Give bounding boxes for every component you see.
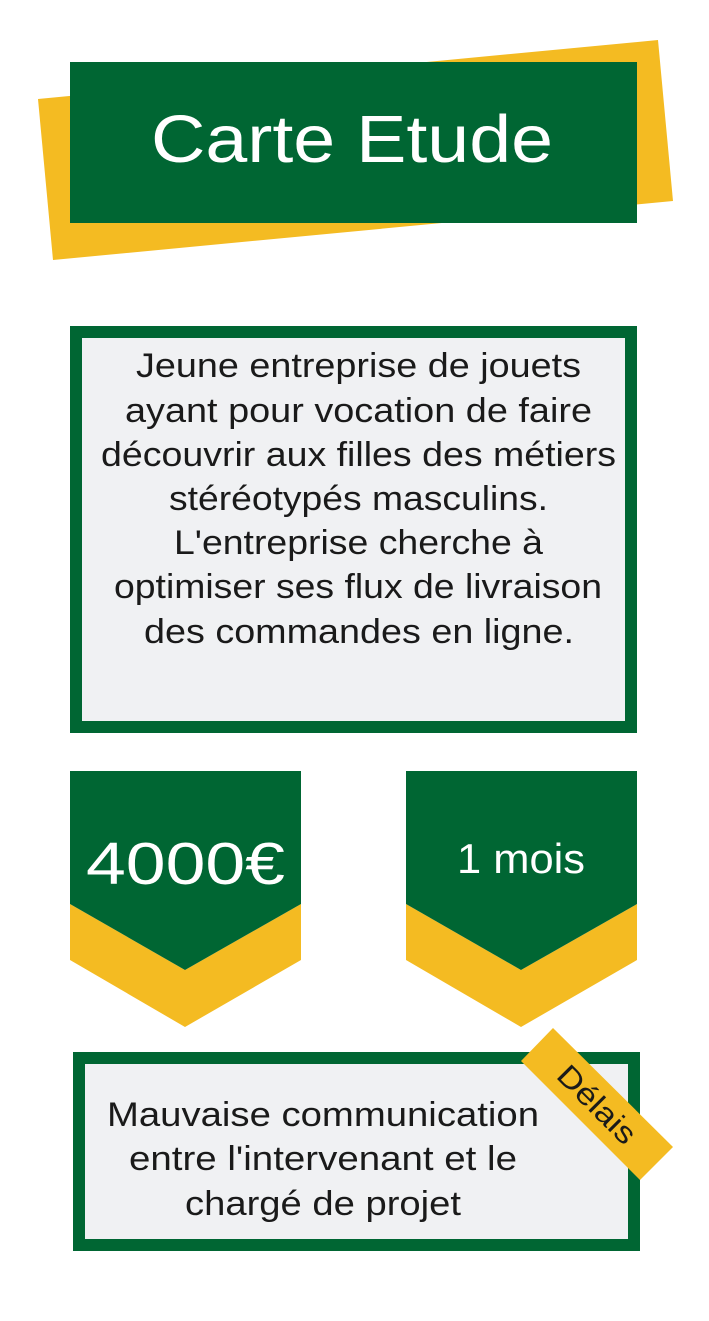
delays text: Mauvaise communication [107,1096,539,1134]
ribbon: Délais [521,1028,673,1180]
title banner [38,40,673,260]
delays text [107,1096,539,1223]
ribbon label: Délais [550,1059,643,1151]
description text: des commandes en ligne. [144,613,574,651]
description text [101,347,616,651]
badge: duration [406,771,637,1027]
duration: 1 mois [457,835,585,882]
green title panel [70,62,637,223]
panel: delays [79,1058,634,1245]
panel: company description [76,332,631,727]
badge: budget [70,771,301,1027]
description text: L'entreprise cherche à [174,524,543,562]
delays text: chargé de projet [185,1185,462,1223]
description text: ayant pour vocation de faire [125,392,592,430]
budget amount: 4000€ [86,831,285,897]
description text: stéréotypés masculins. [169,480,548,518]
title: Carte Etude [151,102,553,177]
description text: découvrir aux filles des métiers [101,436,616,474]
description text: Jeune entreprise de jouets [136,347,581,385]
description text: optimiser ses flux de livraison [114,568,602,606]
delays text: entre l'intervenant et le [129,1140,517,1178]
yellow tilted backing [38,40,673,260]
